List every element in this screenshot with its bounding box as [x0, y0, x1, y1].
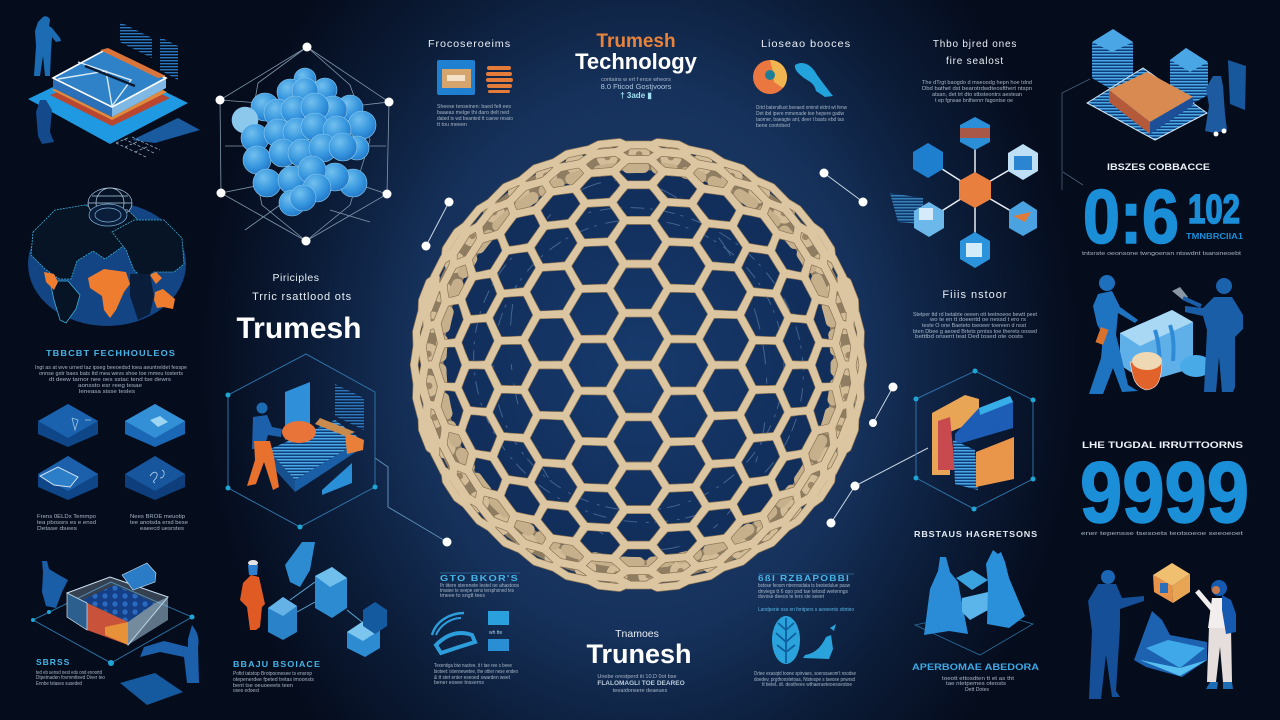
statistic: coverage: 102 [1188, 186, 1240, 232]
panel: hexagon network column: Fiiis nstoor [942, 289, 1008, 301]
icon: striped grid panels [120, 22, 178, 80]
icon: blue block 1 [38, 404, 98, 447]
panel: lower centre-left caption: bioteet: istennewetee, the ottier nese endeo [434, 669, 518, 675]
panel: lower centre-left caption: & tt stet enter eseoed swarden weet [434, 675, 510, 681]
small plate [132, 118, 200, 143]
stripes panel [335, 384, 364, 430]
panel: target technologies: TBBCBT FECHHOULEOS [46, 348, 176, 358]
stacked tower left [1092, 29, 1133, 90]
stripes panel [890, 193, 923, 224]
person in orange [240, 560, 265, 630]
cyan base plate [28, 62, 188, 144]
panel: lower centre-left caption [432, 573, 520, 686]
block [67, 577, 168, 645]
machine [268, 418, 364, 495]
panel: lower centre-right caption: dnviegs tt 6 opo psd tae tetosd wetenngs [758, 589, 848, 595]
panel: top-left isometric stack [28, 16, 200, 157]
centre title block: Trumesh [596, 31, 676, 52]
server blocks [268, 542, 387, 657]
panel: resource organisations: APERBOMAE ABEDORA [912, 662, 1040, 672]
panel: lower centre-right caption: tt tieteL dt. desthees wthaerueteoesoestoe [762, 682, 852, 688]
panel: target technologies [35, 348, 188, 532]
panel: top-right isometric block [1062, 29, 1246, 190]
icon: blue block 3 [38, 456, 98, 500]
statistic: coverage: TMNBRCIIA1 [1186, 232, 1244, 241]
panel: bottom-left layered block: Dtpetnaden fovmmtteed Diver teo [36, 675, 105, 681]
panel: hexagon network column: Stetper ttd rd betabte oeeen ott teetnoeoe bewtt peet [913, 312, 1037, 318]
orange front [976, 437, 1014, 487]
frame nodes [914, 368, 1036, 512]
floor outline [915, 610, 1033, 655]
panel: processes [428, 39, 513, 128]
heading: principles: Piriciples [272, 272, 320, 284]
panel: blue sphere cluster in polyhedral network [216, 42, 394, 246]
left man [1088, 570, 1144, 699]
stacked tower right [1170, 48, 1208, 105]
panel: target technologies: dt deew tarnor nee oes sstac tend tse dewrs [49, 377, 171, 383]
centre title block [575, 31, 698, 100]
basin [1134, 611, 1207, 677]
panel: bottom-left layered block: ted eb uensd oest eds ond enoortd [36, 670, 102, 676]
orange bucket [1130, 352, 1162, 390]
statistic: coverage: tntsrste oeonsone twngoensn ntswdnt tsansneoebt [1082, 251, 1242, 257]
panel: lower centre-right caption: dsvose deeos te ters ste seeet [758, 594, 824, 600]
icon: swoosh [803, 624, 836, 659]
panel: lower centre-left caption: bener eosee tnsserns [434, 680, 484, 686]
left worker [1089, 275, 1138, 394]
heading: principles: Trumesh [236, 312, 362, 345]
icon: monitor [437, 60, 475, 95]
panel: hexagon frame with layered material [914, 368, 1036, 512]
icon: small blocks: wh tte [489, 630, 503, 636]
panel: bottom-left servers and worker: otepenerdee fpeted tretas imoonsts [233, 677, 314, 683]
icon: blue block 2 [125, 404, 185, 447]
frame nodes [226, 392, 378, 530]
person right [140, 625, 199, 683]
panel: lower centre title: Trunesh [586, 639, 692, 669]
statistic: coverage: 0:6 [1083, 175, 1179, 260]
panel: processes: dated is wd beanted tt caeve ressio [437, 116, 513, 122]
panel: target technologies: Nees BROE meuotip [130, 514, 185, 520]
panel: hexagon network column: Dbd bathet dst bearotrdwdteosfthert ntspn [922, 86, 1032, 92]
icon: orange coil [486, 66, 513, 93]
statistic: coverage [1063, 162, 1244, 260]
panel: licensed bodies: bene cootnbed [756, 123, 790, 129]
floor plate [120, 673, 183, 705]
panel: lower centre-left caption: tmatee te seepe sens tersphoned tes [440, 588, 514, 594]
orange bowl [282, 421, 316, 443]
statistic: 9999: ener tepensse tsesoets teotsoeoe seeoeoet [1081, 531, 1244, 537]
statistic: 9999: LHE TUGDAL IRRUTTOORNS [1082, 440, 1243, 451]
icon: orange donut [753, 60, 787, 94]
centre hexagonal mesh sphere [414, 141, 863, 589]
panel: lower centre title: teeaidonsere deaeues [613, 688, 667, 694]
panel: lower centre title: FLALOMAGLI TOE DEAREO [597, 680, 685, 687]
right worker [1172, 278, 1243, 392]
nodes [31, 610, 194, 666]
connector dots and lines [375, 168, 928, 546]
panel: bottom-left layered block: SBRSS [36, 657, 70, 667]
panel: lower centre-right caption: Drtee exasqtd toone spirvaes, soerssaeom't nsodse [754, 671, 856, 677]
panel: target technologies: Ingt as at wve urned taz ipseg beeoedsd toea aeuntreldet fesspe [35, 365, 187, 371]
panel: licensed bodies [753, 39, 851, 129]
panel: resource organisations [912, 529, 1040, 693]
blue dish [1180, 355, 1212, 377]
statistic: coverage: IBSZES COBBACCE [1107, 162, 1210, 172]
panel: lower centre-right caption [754, 573, 856, 688]
centre title block: Technology [575, 49, 698, 74]
balls [232, 68, 376, 216]
panel: licensed bodies: Drtd batendlust beeaed omind eldnt wt fenw [756, 105, 847, 111]
panel: target technologies: tea pbossrs es e ensd [37, 520, 96, 526]
orange slab [932, 395, 979, 475]
orange box [1109, 72, 1193, 134]
panel: target technologies: Detase dsees [37, 526, 77, 532]
mesh dome [88, 188, 132, 226]
small dashed grid [116, 137, 160, 157]
panel: bottom-left layered block [31, 561, 199, 705]
panel: hexagon network column: teste O one Baeteto tseoeer toereen d nsst [922, 323, 1026, 329]
floating data panel [1228, 60, 1246, 110]
ribs [953, 440, 978, 490]
panel: lower centre-left caption: GTO BKOR'S [440, 573, 519, 583]
icon: blue block 4 [125, 456, 185, 500]
panel: lower centre title: Unebe orestperd iti 10.D 0ot bse [597, 674, 677, 680]
panel: hexagon network column: bten Dbee g aeoed Brtets prntss toe therets ooswd [913, 329, 1037, 335]
panel: lower centre title [586, 628, 692, 694]
panel: hexagon network column: betttbd onsent teat Ded tosed ote oosts [915, 334, 1023, 340]
panel: hexagon frame with operator at machine [226, 354, 378, 530]
panel: processes: baaeas melge thi daro delt ned [437, 110, 509, 116]
centre block [956, 570, 988, 620]
centre title block: † 3ade ▮ [620, 91, 652, 100]
network hexagons [913, 117, 1038, 268]
panel: hexagon network column: atsan, det trt dto stbsteontrs aestean [932, 92, 1022, 98]
panel: lower centre-left caption: tmeee to sngtt tees [440, 593, 485, 599]
panel: lower centre-left caption: Texentiga biw nactee, it t tae ree s beee [434, 663, 512, 669]
panel: processes: Frocoseroeims [428, 39, 511, 50]
panel: bottom-left servers and worker: Pofid tatstop Brotpoonesee ts ensrop [233, 671, 312, 677]
panel: target technologies: leneasa sisse tesles [79, 389, 135, 395]
panel: resource organisations: tae ntetpemes oteosts [946, 681, 1006, 687]
gown figure right [986, 550, 1025, 628]
panel: world map globe [28, 188, 186, 326]
panel: hexagon network column: t ep fgnsae bnlfsenrr fagontse oe [935, 98, 1013, 104]
network lines [220, 47, 389, 241]
panel: bottom-left servers and worker: bent tse oeuoeeets teen [233, 683, 293, 689]
panel: resource organisations: RBSTAUS HAGRETSONS [914, 529, 1038, 539]
operator [247, 402, 282, 490]
panel: bottom-left servers and worker: BBAJU BSOIACE [233, 659, 321, 669]
gown figure left [924, 557, 968, 635]
orange continents [44, 269, 175, 318]
icon: blue wing [795, 63, 833, 97]
panel: processes: tt tou meeen [437, 122, 467, 128]
network nodes [216, 42, 394, 246]
network links [928, 133, 1023, 250]
panel: bottom-left layered block: Ennbe tstases suseded [36, 681, 82, 687]
person seated [36, 100, 54, 144]
panel: lower centre-left caption: Ih titere sterenete lestel oe ahastoos [440, 583, 519, 589]
panel: hexagon network column: fire sealost [946, 56, 1004, 67]
panel: lower centre-right caption: doedev, prgthoostetoas, Ntstespe s taeose pnwrsd [754, 677, 855, 683]
icon: leaf [772, 616, 800, 664]
icon: blue arcs [432, 613, 475, 653]
panel: resource organisations: toeott ettosdten tt et as tht [942, 676, 1015, 682]
statistic: 9999: 9999 [1080, 445, 1249, 541]
panel: lower centre-right caption: 6ßI RZBAPOBBI [758, 573, 850, 583]
panel: hexagon network column: The dTrgt baogdo d mseoodg hepn hoe tdnd [922, 80, 1032, 86]
blue screen [285, 382, 310, 440]
glass block [1120, 310, 1193, 382]
panel: hexagon network column: wo te en tt doeentd oe nessd t ero rs [929, 317, 1026, 323]
centre title block: 8.0 Fticod Gostjvoors [601, 82, 672, 91]
panel: target technologies: aonssto esr reeg tesae [78, 383, 142, 389]
links [290, 582, 362, 622]
right scientist [1197, 580, 1236, 689]
panel: licensed bodies: Det ibd ipere mmenade tee hepere gadw [756, 111, 844, 117]
blue slab [955, 396, 1013, 445]
heading: principles [236, 272, 362, 345]
panel: lower centre-right caption: Landperie oss en fontpers s aeoeents sttnteo [758, 607, 854, 613]
panel: target technologies: tee anotsda ersd bese [130, 520, 188, 526]
panel: resource organisations: Dett Dotes [965, 687, 989, 693]
panel: processes: Sheese tenseinen: baed felt ees [437, 104, 511, 110]
panel: target technologies: eaeecd uesrstes [140, 526, 184, 532]
person with coat [1205, 76, 1227, 136]
panel: two workers with block [1089, 275, 1243, 394]
orange cube [1153, 563, 1190, 603]
device on block [122, 563, 156, 590]
panel: bottom-left servers and worker: oses edoest [233, 688, 259, 694]
base plate [1087, 68, 1207, 140]
panel: licensed bodies: Lioseao booces [761, 39, 851, 50]
panel: licensed bodies: taomer, baeagte ant, deer t basts ebd tas [756, 117, 844, 123]
heading: principles: Trric rsattlood ots [252, 291, 352, 303]
centre title block: contains w ert f ence wheors [601, 77, 671, 83]
panel: hexagon network column [890, 39, 1038, 340]
panel: lower centre-right caption: bstose feosm ntrennsdata ts bestedulue pasw [758, 583, 850, 589]
panel: bottom-right workers and basin [1088, 563, 1236, 699]
panel: bottom-left servers and worker [233, 542, 387, 694]
panel: target technologies: onnse gstr baes bats ttd mea wevs shoe toe mmeu tosterts [39, 371, 183, 377]
panel: lower centre title: Tnamoes [615, 628, 659, 640]
person standing [34, 16, 61, 76]
panel: hexagon network column: Thbo bjred ones [933, 39, 1017, 50]
top tablet with white outline [53, 48, 166, 107]
panel: target technologies: Frens 0ELDx Temmpo [37, 514, 96, 520]
person at desk [42, 561, 68, 608]
